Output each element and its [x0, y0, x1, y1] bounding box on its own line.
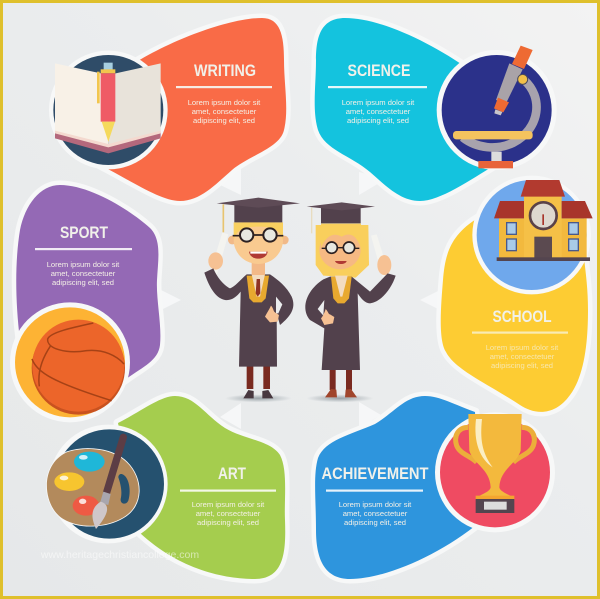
panel: art	[47, 396, 285, 579]
writing text: adipiscing elit, sed	[193, 116, 255, 125]
school text: Lorem ipsum dolor sit	[486, 343, 558, 352]
art blob	[118, 396, 285, 579]
panel: writing	[49, 18, 286, 201]
art text: Lorem ipsum dolor sit	[192, 500, 264, 509]
sport blob	[16, 185, 160, 382]
writing text: Lorem ipsum dolor sit	[188, 98, 260, 107]
panel: sport	[10, 185, 160, 422]
writing blob	[100, 18, 286, 201]
school blob	[441, 218, 588, 412]
sport text: adipiscing elit, sed	[52, 278, 114, 287]
panel: school	[441, 176, 593, 412]
science text: adipiscing elit, sed	[347, 116, 409, 125]
achievement blob	[315, 396, 480, 579]
science blob	[315, 18, 495, 201]
writing text: amet, consectetuer	[192, 107, 257, 116]
achievement text: amet, consectetuer	[343, 509, 408, 518]
achievement text: adipiscing elit, sed	[344, 518, 406, 527]
art text: adipiscing elit, sed	[197, 518, 259, 527]
graduate: man	[204, 198, 300, 402]
center pointer triangles	[155, 168, 446, 429]
school text: adipiscing elit, sed	[491, 361, 553, 370]
icon: trophy	[435, 412, 555, 532]
sport text: amet, consectetuer	[51, 269, 116, 278]
illustration: graduates	[204, 198, 396, 402]
achievement heading: ACHIEVEMENT	[322, 465, 428, 483]
icon: school building	[472, 176, 593, 294]
art text: amet, consectetuer	[196, 509, 261, 518]
icon: book and pen	[49, 51, 168, 169]
science heading: SCIENCE	[348, 62, 410, 80]
writing heading: WRITING	[194, 62, 256, 80]
watermark text: www.heritagechristiancollege.com	[40, 549, 199, 561]
sport text: Lorem ipsum dolor sit	[47, 260, 119, 269]
icon: basketball	[10, 302, 130, 422]
school text: amet, consectetuer	[490, 352, 555, 361]
achievement text: Lorem ipsum dolor sit	[339, 500, 411, 509]
panel: science	[315, 18, 557, 201]
panel: achievement	[315, 396, 555, 579]
science text: Lorem ipsum dolor sit	[342, 98, 414, 107]
science text: amet, consectetuer	[346, 107, 411, 116]
art heading: ART	[218, 465, 246, 483]
graduate: woman	[305, 202, 396, 402]
icon: paint palette	[47, 425, 168, 543]
icon: microscope	[437, 46, 557, 170]
school heading: SCHOOL	[492, 308, 552, 326]
sport heading: SPORT	[60, 224, 108, 242]
